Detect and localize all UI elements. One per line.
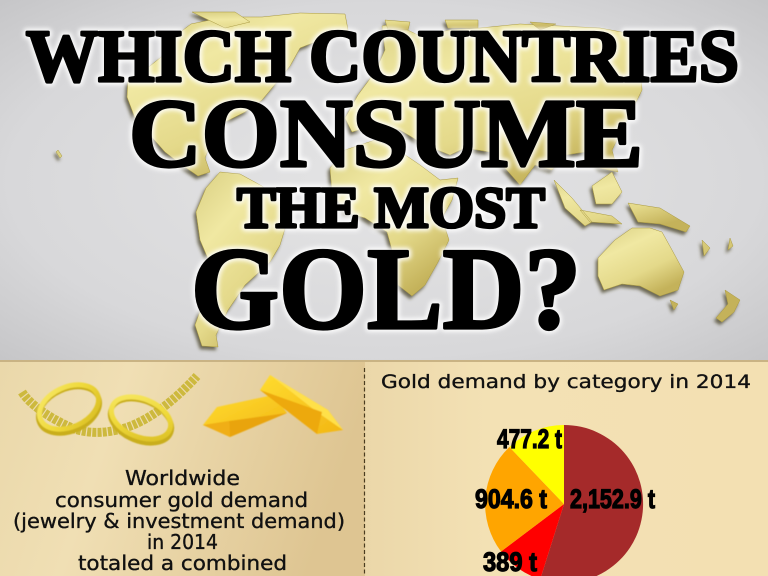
text: worldwide demand: totaled a combined: [78, 551, 287, 575]
title: THE MOST: [237, 175, 545, 240]
heading: gold demand by category: Gold demand by category in 2014: [381, 371, 751, 393]
pie chart: [485, 425, 643, 576]
title: [26, 16, 739, 354]
title: GOLD?: [191, 225, 581, 354]
text: worldwide demand: consumer gold demand: [55, 488, 308, 512]
divider: [364, 368, 366, 576]
pie labels: 904.6 t: [475, 484, 547, 514]
title: CONSUME: [129, 80, 643, 188]
pie labels: 2,152.9 t: [570, 484, 655, 514]
text: worldwide demand: Worldwide: [125, 466, 240, 490]
text: worldwide demand: (jewelry & investment demand): [13, 509, 345, 533]
title: GOLD?: [191, 225, 581, 354]
panel: consumer demand: [0, 360, 768, 576]
pie labels: [475, 424, 655, 576]
title: WHICH COUNTRIES: [26, 16, 739, 98]
icon: gold chain: [22, 376, 197, 432]
title: THE MOST: [237, 175, 545, 240]
panel: demand by category: [365, 362, 768, 576]
world map in gold: [56, 12, 740, 347]
text: worldwide demand: in 2014: [147, 530, 218, 554]
panel: map header background: [0, 0, 768, 361]
title: CONSUME: [129, 80, 643, 188]
text: worldwide demand: [13, 466, 345, 575]
title: WHICH COUNTRIES: [26, 16, 739, 98]
icon: gold rings: [31, 376, 178, 452]
icon: gold bars: [203, 375, 343, 437]
pie labels: 477.2 t: [497, 424, 562, 454]
